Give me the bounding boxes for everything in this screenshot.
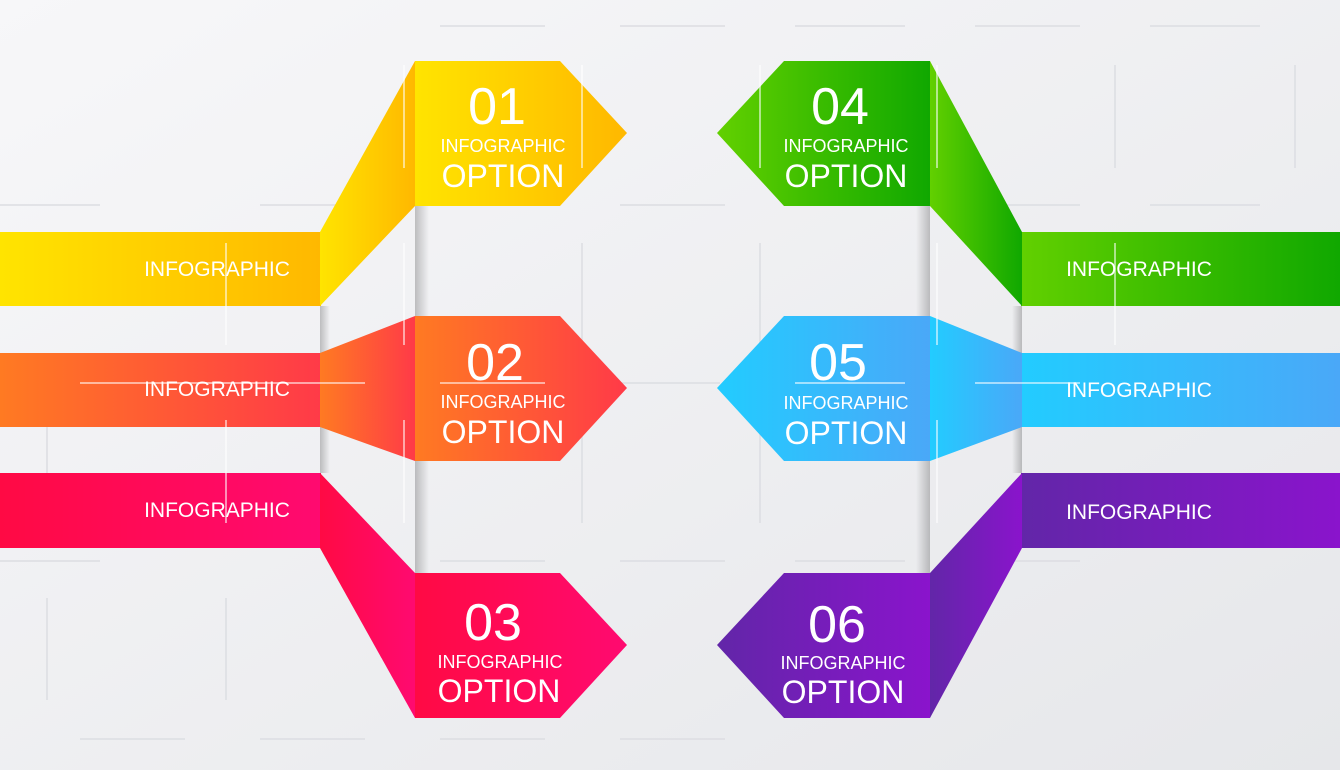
- connector 3: [320, 473, 415, 718]
- panel: option 02 (orange): [0, 316, 627, 461]
- box 06: INFOGRAPHIC: [780, 653, 906, 673]
- box 04: INFOGRAPHIC: [783, 136, 909, 156]
- box 06: OPTION: [782, 674, 904, 710]
- left bar 1: INFOGRAPHIC: [144, 258, 290, 281]
- right bar 5: [1021, 353, 1340, 427]
- box 05: OPTION: [785, 415, 907, 451]
- panel: option 03 (pink): [0, 473, 627, 718]
- box 01: [415, 61, 627, 206]
- left bar 2: INFOGRAPHIC: [144, 378, 290, 401]
- box 06: [717, 573, 930, 718]
- connector 5: [930, 316, 1022, 461]
- panel: option 04 (green): [717, 61, 1340, 306]
- box 04: OPTION: [785, 158, 907, 194]
- right bar 4: [1021, 232, 1340, 306]
- box 04: 04: [811, 78, 869, 136]
- box 05: [717, 316, 930, 461]
- box 01: INFOGRAPHIC: [440, 136, 566, 156]
- box 05: 05: [809, 334, 867, 392]
- right bar 6: [1021, 473, 1340, 548]
- left bar 3: INFOGRAPHIC: [144, 499, 290, 522]
- panel: option 05 (blue): [717, 316, 1340, 461]
- left bar 3: [0, 473, 321, 548]
- box 02: INFOGRAPHIC: [440, 392, 566, 412]
- box 06: 06: [808, 596, 866, 654]
- right bar 6: INFOGRAPHIC: [1066, 501, 1212, 524]
- right bar 4: INFOGRAPHIC: [1066, 258, 1212, 281]
- panel: option 06 (purple): [717, 473, 1340, 718]
- box 04: [717, 61, 930, 206]
- connector 2: [320, 316, 415, 461]
- box 02: 02: [466, 334, 524, 392]
- box 03: [415, 573, 627, 718]
- connector 4: [930, 61, 1022, 306]
- left bar 2: [0, 353, 321, 427]
- panel: option 01 (yellow): [0, 61, 627, 306]
- box 03: INFOGRAPHIC: [437, 652, 563, 672]
- left bar 1: [0, 232, 321, 306]
- box 02: OPTION: [442, 414, 564, 450]
- box 01: OPTION: [442, 158, 564, 194]
- box 01: 01: [468, 78, 526, 136]
- connector 6: [930, 473, 1022, 718]
- box 03: 03: [464, 594, 522, 652]
- right bar 5: INFOGRAPHIC: [1066, 379, 1212, 402]
- box 02: [415, 316, 627, 461]
- box 05: INFOGRAPHIC: [783, 393, 909, 413]
- box 03: OPTION: [438, 673, 560, 709]
- connector 1: [320, 61, 415, 306]
